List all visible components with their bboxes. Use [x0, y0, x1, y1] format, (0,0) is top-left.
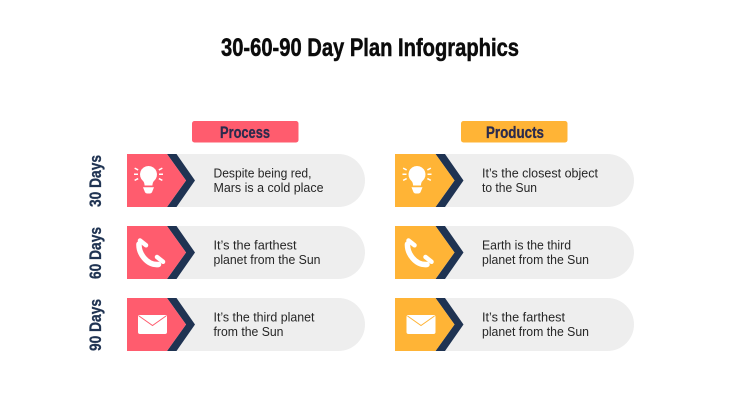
title: 30-60-90 Day Plan Infographics: [221, 34, 519, 62]
text: [214, 166, 324, 195]
label: 30 Days: 30 Days: [86, 155, 105, 207]
text: planet from the Sun: [482, 253, 589, 267]
heading: Products: [461, 121, 568, 142]
text: [214, 238, 321, 267]
row: Process 90 Days: [127, 298, 365, 351]
label: 60 Days: 60 Days: [86, 227, 105, 279]
text: It’s the farthest: [482, 310, 566, 324]
icon: light bulb: [402, 166, 432, 194]
text: to the Sun: [482, 181, 537, 195]
text: planet from the Sun: [482, 325, 589, 339]
text: [482, 166, 599, 195]
text: Earth is the third: [482, 238, 571, 252]
icon: light bulb: [134, 166, 163, 194]
icon: phone: [139, 240, 163, 265]
text: Mars is a cold place: [214, 181, 324, 195]
text: [482, 310, 589, 339]
label: 90 Days: 90 Days: [86, 299, 105, 351]
row: Products 30 Days: [395, 154, 634, 207]
heading: Products: Products: [486, 123, 544, 142]
icon: envelope: [138, 315, 167, 334]
text: [482, 238, 589, 267]
text: [214, 310, 315, 339]
text: It’s the closest object: [482, 166, 599, 180]
row: Process 60 Days: [127, 226, 365, 279]
icon: envelope: [406, 315, 436, 334]
text: planet from the Sun: [214, 253, 321, 267]
row: Products 60 Days: [395, 226, 634, 279]
row: Products 90 Days: [395, 298, 634, 351]
icon: phone: [407, 240, 432, 265]
text: It’s the farthest: [214, 238, 297, 252]
heading: Process: [192, 121, 298, 142]
heading: Process: Process: [220, 123, 270, 142]
text: from the Sun: [214, 325, 284, 339]
row: Process 30 Days: [127, 154, 365, 207]
text: It’s the third planet: [214, 310, 315, 324]
text: Despite being red,: [214, 166, 312, 180]
